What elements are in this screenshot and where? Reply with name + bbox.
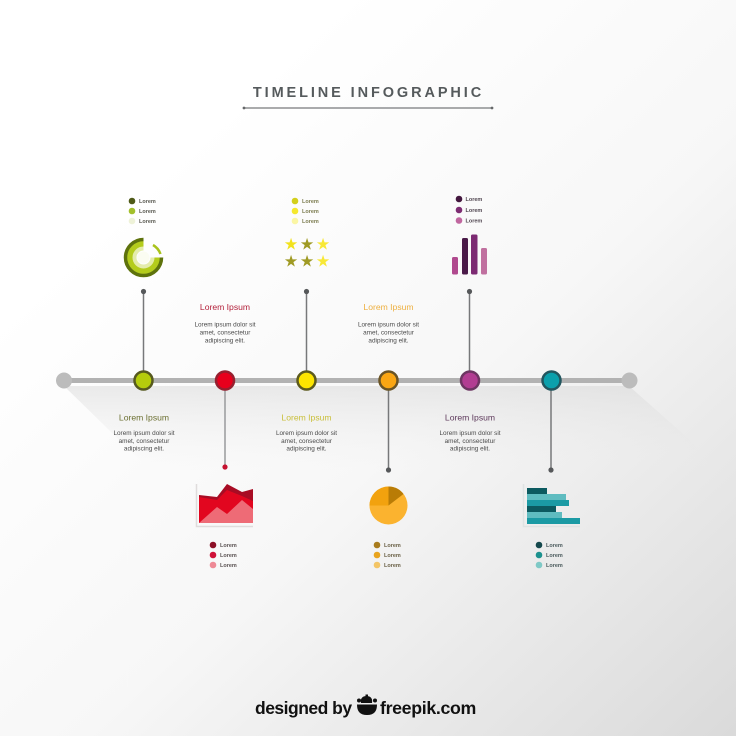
heading and body: red block: adipiscing elit. [205, 338, 245, 344]
heading and body: purple block [439, 412, 501, 452]
node: purple [461, 372, 479, 390]
heading and body: yellow block: Lorem ipsum dolor sit [276, 430, 337, 437]
icon: bar chart [452, 234, 487, 274]
heading and body: red block [194, 302, 256, 344]
node: red [216, 372, 234, 390]
node: yellow [298, 372, 316, 390]
legend: purple: Lorem [466, 218, 482, 224]
node: orange [380, 372, 398, 390]
heading and body: yellow block: amet, consectetur [281, 438, 333, 445]
heading and body: purple block: Lorem ipsum dolor sit [439, 430, 501, 437]
icon: area chart [196, 484, 253, 526]
long shadow under timeline [64, 386, 715, 470]
legend: orange: Lorem [384, 553, 401, 559]
heading and body: green block: Lorem ipsum dolor sit [113, 430, 175, 437]
icon: stars: ★ [300, 234, 314, 254]
legend: orange: Lorem [384, 563, 401, 569]
legend: teal: Lorem [546, 553, 563, 559]
legend: green: Lorem [139, 219, 156, 225]
legend: green [129, 198, 156, 225]
heading and body: green block [113, 412, 175, 452]
heading and body: orange block: Lorem ipsum dolor sit [358, 322, 419, 328]
legend: red: Lorem [220, 563, 237, 569]
legend: yellow: Lorem [302, 209, 319, 215]
footer: designed by freepik: designed by [255, 698, 352, 718]
node: green [134, 372, 152, 390]
icon: horizontal bar chart [524, 484, 580, 526]
legend: purple [456, 196, 482, 224]
icon: stars [284, 234, 330, 270]
heading and body: purple block: amet, consectetur [445, 438, 496, 445]
icon: stars: ★ [316, 252, 330, 270]
heading and body: orange block: amet, consectetur [363, 330, 415, 336]
heading and body: green block: adipiscing elit. [124, 446, 164, 452]
footer: designed by freepik [255, 694, 476, 718]
icon: freepik crest [357, 694, 377, 715]
node: teal [542, 372, 560, 390]
legend: orange: Lorem [384, 543, 401, 549]
heading and body: yellow block [276, 412, 337, 452]
icon: stars: ★ [316, 234, 330, 254]
legend: teal: Lorem [546, 543, 563, 549]
icon: pie chart [370, 486, 408, 524]
legend: purple: Lorem [466, 197, 482, 203]
title: TIMELINE INFOGRAPHIC [253, 85, 484, 101]
heading and body: orange block: adipiscing elit. [368, 338, 409, 344]
heading and body: red block: Lorem ipsum dolor sit [194, 322, 256, 328]
timeline axis [56, 372, 638, 388]
icon: stars: ★ [284, 252, 298, 270]
legend: teal [536, 542, 563, 569]
legend: yellow: Lorem [302, 199, 319, 205]
legend: yellow: Lorem [302, 219, 319, 225]
legend: green: Lorem [139, 209, 156, 215]
legend: yellow [292, 198, 319, 225]
heading and body: green block: Lorem Ipsum [119, 412, 169, 422]
stems [144, 292, 551, 470]
heading and body: green block: amet, consectetur [119, 438, 170, 445]
heading and body: orange block [358, 302, 419, 344]
stem end dots [141, 289, 554, 473]
legend: orange [374, 542, 401, 569]
heading and body: orange block: Lorem Ipsum [363, 302, 414, 312]
legend: red: Lorem [220, 543, 237, 549]
legend: teal: Lorem [546, 563, 563, 569]
icon: stars: ★ [284, 234, 298, 254]
heading and body: yellow block: adipiscing elit. [286, 446, 327, 452]
legend: green: Lorem [139, 199, 156, 205]
icon: stars: ★ [300, 252, 314, 270]
legend: red: Lorem [220, 553, 237, 559]
footer: designed by freepik: freepik.com [380, 698, 476, 718]
legend: purple: Lorem [466, 208, 482, 214]
legend: red [210, 542, 237, 569]
heading and body: purple block: adipiscing elit. [450, 446, 490, 452]
heading and body: yellow block: Lorem Ipsum [281, 412, 332, 422]
heading and body: purple block: Lorem Ipsum [445, 412, 495, 422]
heading and body: red block: amet, consectetur [200, 330, 251, 336]
icon: donut chart [126, 240, 162, 276]
heading and body: red block: Lorem Ipsum [200, 302, 250, 312]
